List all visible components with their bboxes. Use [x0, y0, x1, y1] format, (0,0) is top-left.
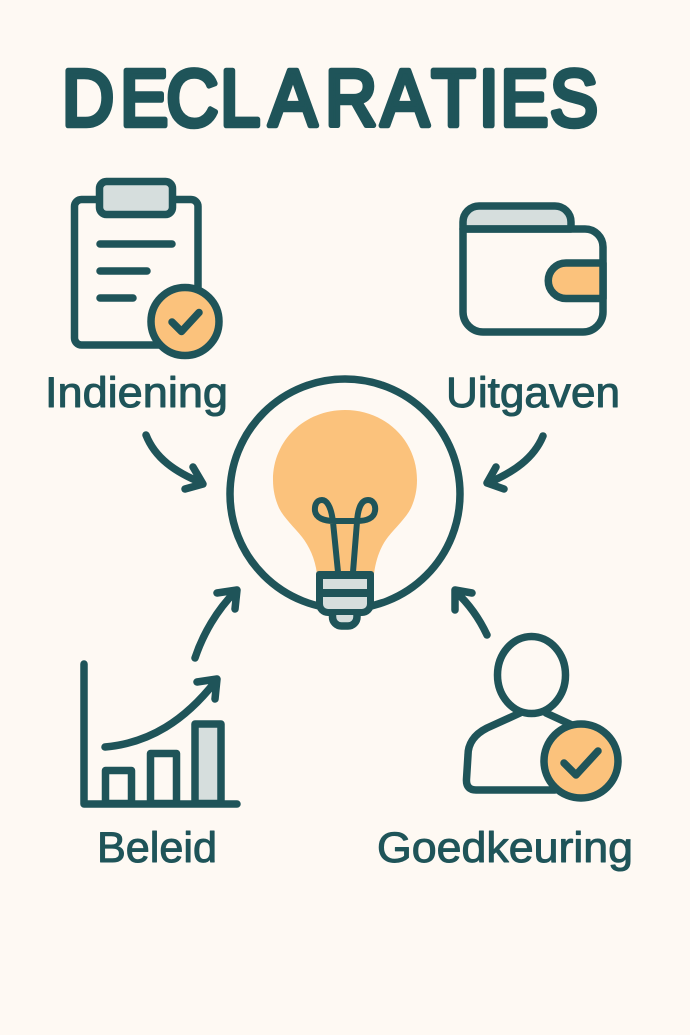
label: Indiening: Indiening — [45, 369, 228, 417]
icon: wallet — [463, 206, 603, 332]
icon: person with check — [466, 636, 618, 798]
label: Uitgaven: Uitgaven — [446, 369, 620, 417]
ring — [230, 379, 460, 609]
bulb glass — [273, 410, 417, 574]
title: DECLARATIES — [62, 54, 598, 143]
icon: bar chart with rising arrow — [84, 664, 237, 804]
socket tip — [332, 615, 357, 626]
arrow: Beleid to bulb — [195, 590, 237, 658]
filament — [315, 500, 375, 572]
label: Goedkeuring: Goedkeuring — [377, 824, 633, 872]
arrow: Uitgaven to bulb — [487, 436, 543, 489]
icon: clipboard with check — [74, 182, 219, 356]
icon: light bulb in circle — [230, 379, 460, 626]
socket — [316, 571, 374, 616]
arrow: Goedkeuring to bulb — [455, 590, 487, 635]
arrow: Indiening to bulb — [146, 435, 203, 489]
label: Beleid: Beleid — [97, 824, 217, 872]
